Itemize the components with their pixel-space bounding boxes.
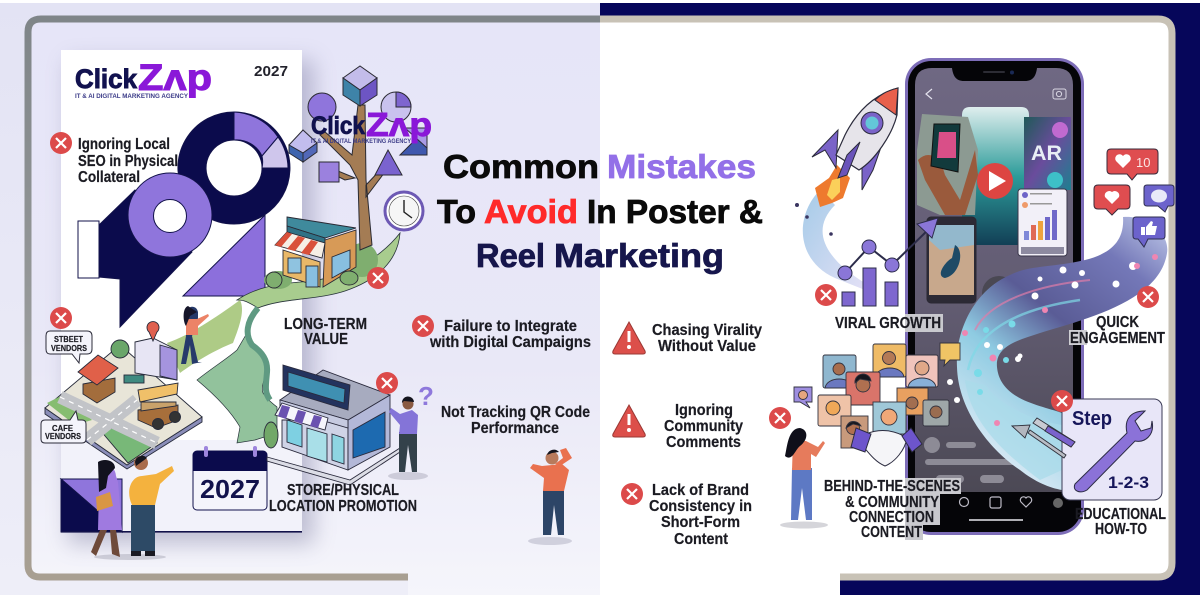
text: brand consistency: Content <box>674 531 729 548</box>
text: behind the scenes: CONNECTION <box>849 509 934 526</box>
panel: left interior <box>30 22 600 595</box>
icon: handshake <box>851 428 922 466</box>
illustration: hand and phone <box>917 114 978 215</box>
text: behind the scenes: CONTENT <box>861 524 922 541</box>
chart: viral growth bars and arrow <box>838 218 938 306</box>
icon: x badge shop <box>367 267 389 289</box>
text: brand consistency <box>649 482 752 548</box>
logo: ClickZap poster: Click <box>75 64 138 94</box>
logo: ClickZap overlay: Zʌp <box>366 106 432 143</box>
illustration: isometric market <box>45 322 202 469</box>
icon: heart bubble 10 <box>1107 149 1158 180</box>
text: store promotion label: LOCATION PROMOTION <box>269 498 417 515</box>
text: long-term value <box>284 316 367 348</box>
text: store promotion label <box>269 482 417 515</box>
text: ignoring community: Ignoring <box>675 402 733 419</box>
logo: ClickZap overlay <box>311 106 432 145</box>
text: ignoring local SEO: SEO in Physical <box>78 153 178 170</box>
panel: right interior <box>600 22 1170 595</box>
icon: x badge brand <box>621 483 643 505</box>
icon: x badge engagement <box>1137 286 1159 308</box>
icon: x badge street <box>50 307 72 329</box>
text: behind the scenes: & COMMUNITY <box>845 494 940 511</box>
logo: ClickZap overlay: IT & AI DIGITAL MARKETING AGENCY <box>311 139 411 145</box>
icon: x badge community <box>769 407 791 429</box>
illustration: digital store <box>264 365 400 485</box>
illustration: community portraits <box>794 343 960 448</box>
callout: cafe vendors <box>41 411 86 443</box>
callout: street vendors: STBEET <box>54 334 84 344</box>
illustration: reel card <box>927 217 976 303</box>
illustration: woman with phone <box>780 428 828 528</box>
callout: cafe vendors: VENDORS <box>45 431 81 441</box>
callout: cafe vendors: CAFE <box>52 423 73 433</box>
title: Avoid <box>484 193 578 230</box>
icon: x badge step <box>1051 390 1073 412</box>
illustration: tree <box>289 66 427 250</box>
text: ignoring local SEO <box>78 136 178 186</box>
callout: street vendors: VENDORS <box>51 343 87 353</box>
text: viral growth: VIRAL GROWTH <box>835 315 941 332</box>
panel: poster <box>61 50 314 544</box>
title: Common <box>443 148 599 185</box>
icon: thumb bubble <box>1133 217 1165 247</box>
title <box>437 148 763 274</box>
illustration: couple <box>91 456 174 560</box>
title: Mistakes <box>607 148 756 185</box>
text: quick engagement: QUICK <box>1096 314 1140 331</box>
text: chasing virality <box>652 322 762 355</box>
title: To <box>437 193 476 230</box>
background: right navy half <box>600 3 1200 595</box>
panel: step card <box>1062 399 1162 500</box>
text: chasing virality: Without Value <box>658 338 756 355</box>
text: behind the scenes <box>824 478 961 541</box>
illustration: man with question mark <box>388 381 434 480</box>
icon: warning comments <box>613 405 645 437</box>
icon: clock <box>385 192 423 230</box>
illustration: rocket <box>795 88 898 290</box>
title: Marketing <box>554 237 724 274</box>
text: failure to integrate: with Digital Campaigns <box>429 334 591 351</box>
text: ignoring local SEO: Collateral <box>78 169 140 186</box>
callout: street vendors <box>46 331 92 363</box>
chart: analytics card <box>1018 189 1067 256</box>
icon: warning virality <box>613 322 645 354</box>
icon: heart bubble 10: 10 <box>1136 155 1150 170</box>
chart: poster shapes <box>61 112 290 532</box>
text: ignoring community <box>664 402 743 451</box>
icon: calendar 2027 <box>193 446 267 510</box>
text: brand consistency: Short-Form <box>661 514 740 531</box>
text: ignoring community: Comments <box>666 434 741 451</box>
text: ignoring community: Community <box>664 418 743 435</box>
text: store promotion label: STORE/PHYSICAL <box>287 482 399 499</box>
text: QR code: Not Tracking QR Code <box>441 404 590 421</box>
logo: ClickZap poster: Zʌp <box>138 57 212 98</box>
chart: collage center panel <box>962 107 1029 245</box>
icon: gray play <box>982 276 1016 310</box>
illustration: AR panel <box>1024 117 1071 190</box>
icon: heart bubble <box>1094 185 1130 215</box>
feed placeholders <box>924 437 1015 483</box>
text: brand consistency: Consistency in <box>649 498 752 515</box>
illustration: man with question mark: ? <box>418 381 434 411</box>
text: educational how-to <box>1075 506 1166 538</box>
illustration: path and hill <box>167 233 400 443</box>
icon: x badge viral <box>815 284 837 306</box>
text: behind the scenes: BEHIND-THE-SCENES <box>824 478 960 495</box>
text: educational how-to: HOW-TO <box>1095 521 1147 538</box>
text: poster year: 2027 <box>254 64 288 80</box>
text: long-term value: VALUE <box>304 331 348 348</box>
illustration: phone <box>905 58 1084 535</box>
illustration: puzzled man <box>528 448 572 545</box>
bottom nav icons <box>960 497 1063 520</box>
icon: comment bubble <box>1144 185 1174 212</box>
icon: x badge store <box>376 372 398 394</box>
icon: x badge integrate <box>412 315 434 337</box>
text: 1-2-3: 1-2-3 <box>1108 473 1149 492</box>
text: QR code <box>441 404 590 437</box>
text: quick engagement <box>1069 314 1165 347</box>
text: QR code: Performance <box>471 420 559 437</box>
text: quick engagement: ENGAGEMENT <box>1070 330 1165 347</box>
text: step: Step <box>1072 408 1112 430</box>
text: failure to integrate <box>429 318 591 351</box>
illustration: walking woman <box>181 306 209 364</box>
text: educational how-to: EDUCATIONAL <box>1075 506 1166 523</box>
text: long-term value: LONG-TERM <box>284 316 367 333</box>
icon: wrench <box>1074 411 1153 492</box>
illustration: engagement swirl <box>947 217 1167 490</box>
icon: small tools <box>1012 418 1075 458</box>
text: ignoring local SEO: Ignoring Local <box>78 136 170 153</box>
text: failure to integrate: Failure to Integrate <box>444 318 577 335</box>
text: brand consistency: Lack of Brand <box>652 482 749 499</box>
background: left lavender half <box>0 3 600 595</box>
text: chasing virality: Chasing Virality <box>652 322 762 339</box>
icon: red play <box>977 163 1013 199</box>
title: In Poster & <box>587 193 763 230</box>
logo: ClickZap overlay: Click <box>311 112 365 140</box>
icon: x badge local SEO <box>50 132 72 154</box>
illustration: shop <box>266 217 358 288</box>
logo: ClickZap poster <box>75 57 212 100</box>
logo: ClickZap poster: IT & AI DIGITAL MARKETING AGENCY <box>75 93 189 100</box>
title: Reel <box>476 237 545 274</box>
illustration: AR panel: AR <box>1031 142 1062 165</box>
icon: calendar 2027: 2027 <box>200 474 260 504</box>
